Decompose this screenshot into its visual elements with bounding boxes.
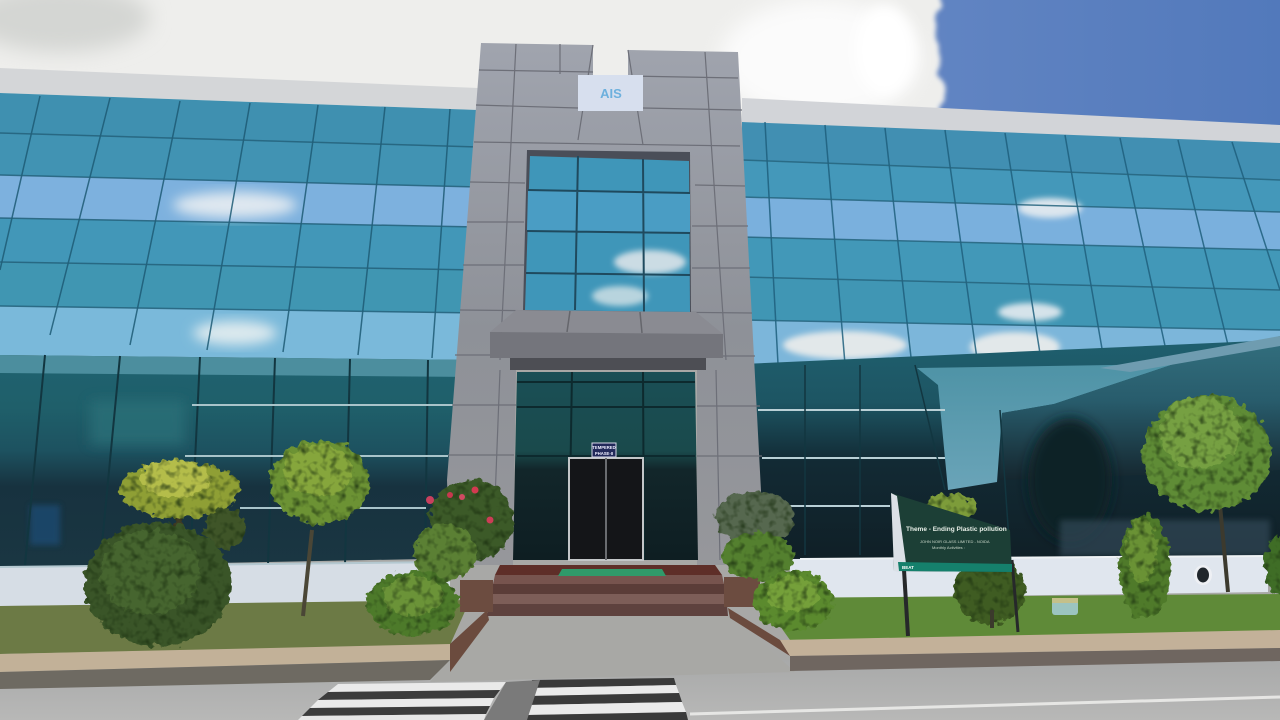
lower dark glass right [742,340,1280,562]
glass rows left [0,93,478,360]
reflected pale pane [917,364,1174,490]
right wing of building [742,98,1280,598]
signboard: Theme - Ending Plastic pollution [906,526,1007,533]
entrance steps [460,565,760,616]
sign: AIS [578,75,643,111]
shrubs by stairs right [715,492,833,631]
tree: yellow-green shrub left [120,460,245,548]
glass rows right [742,122,1280,368]
bush: dark round left [84,522,232,646]
lower dark glass left [0,355,478,567]
road marking [690,697,1280,714]
sign: AIS: AIS [600,86,622,101]
white base wall left [0,562,450,606]
paved walkway [430,614,795,682]
left wing of building [0,68,478,606]
signboard: BEAT [902,565,914,570]
wall vent [1194,565,1212,585]
entrance glass [513,372,698,560]
yellow planter [1052,598,1078,615]
entrance canopy [490,310,723,370]
ground: grass, path and road [0,594,1280,720]
tree: slim left [270,440,370,616]
door notice [592,443,616,457]
zebra crossing [298,678,688,720]
bush: edge right [1265,536,1280,596]
right lawn [760,594,1280,640]
signboard: Monthly Activities : [932,545,965,550]
left lawn [0,600,470,654]
sky [0,0,1280,140]
green doormat [558,569,666,576]
left curb [0,610,489,689]
signboard: JOHN NOIR GLASS LIMITED - NOIDA [920,539,990,544]
right curb [728,608,1280,671]
signboard [891,493,1018,636]
door notice: PHASE-II [595,451,613,456]
reflected curved building [1000,336,1280,480]
glass door [569,458,643,560]
roof band right [742,98,1280,145]
tree: large right [1143,395,1271,592]
bush: narrow right [1119,515,1171,619]
white base wall right [790,556,1268,598]
tree behind signboard [924,494,1026,628]
tower cladding seams [448,70,762,456]
upper tower window [523,150,691,313]
roof band left [0,68,478,110]
flowering shrubs by stairs left [367,480,514,635]
door notice: TEMPERED [592,445,616,450]
road [0,660,1280,720]
